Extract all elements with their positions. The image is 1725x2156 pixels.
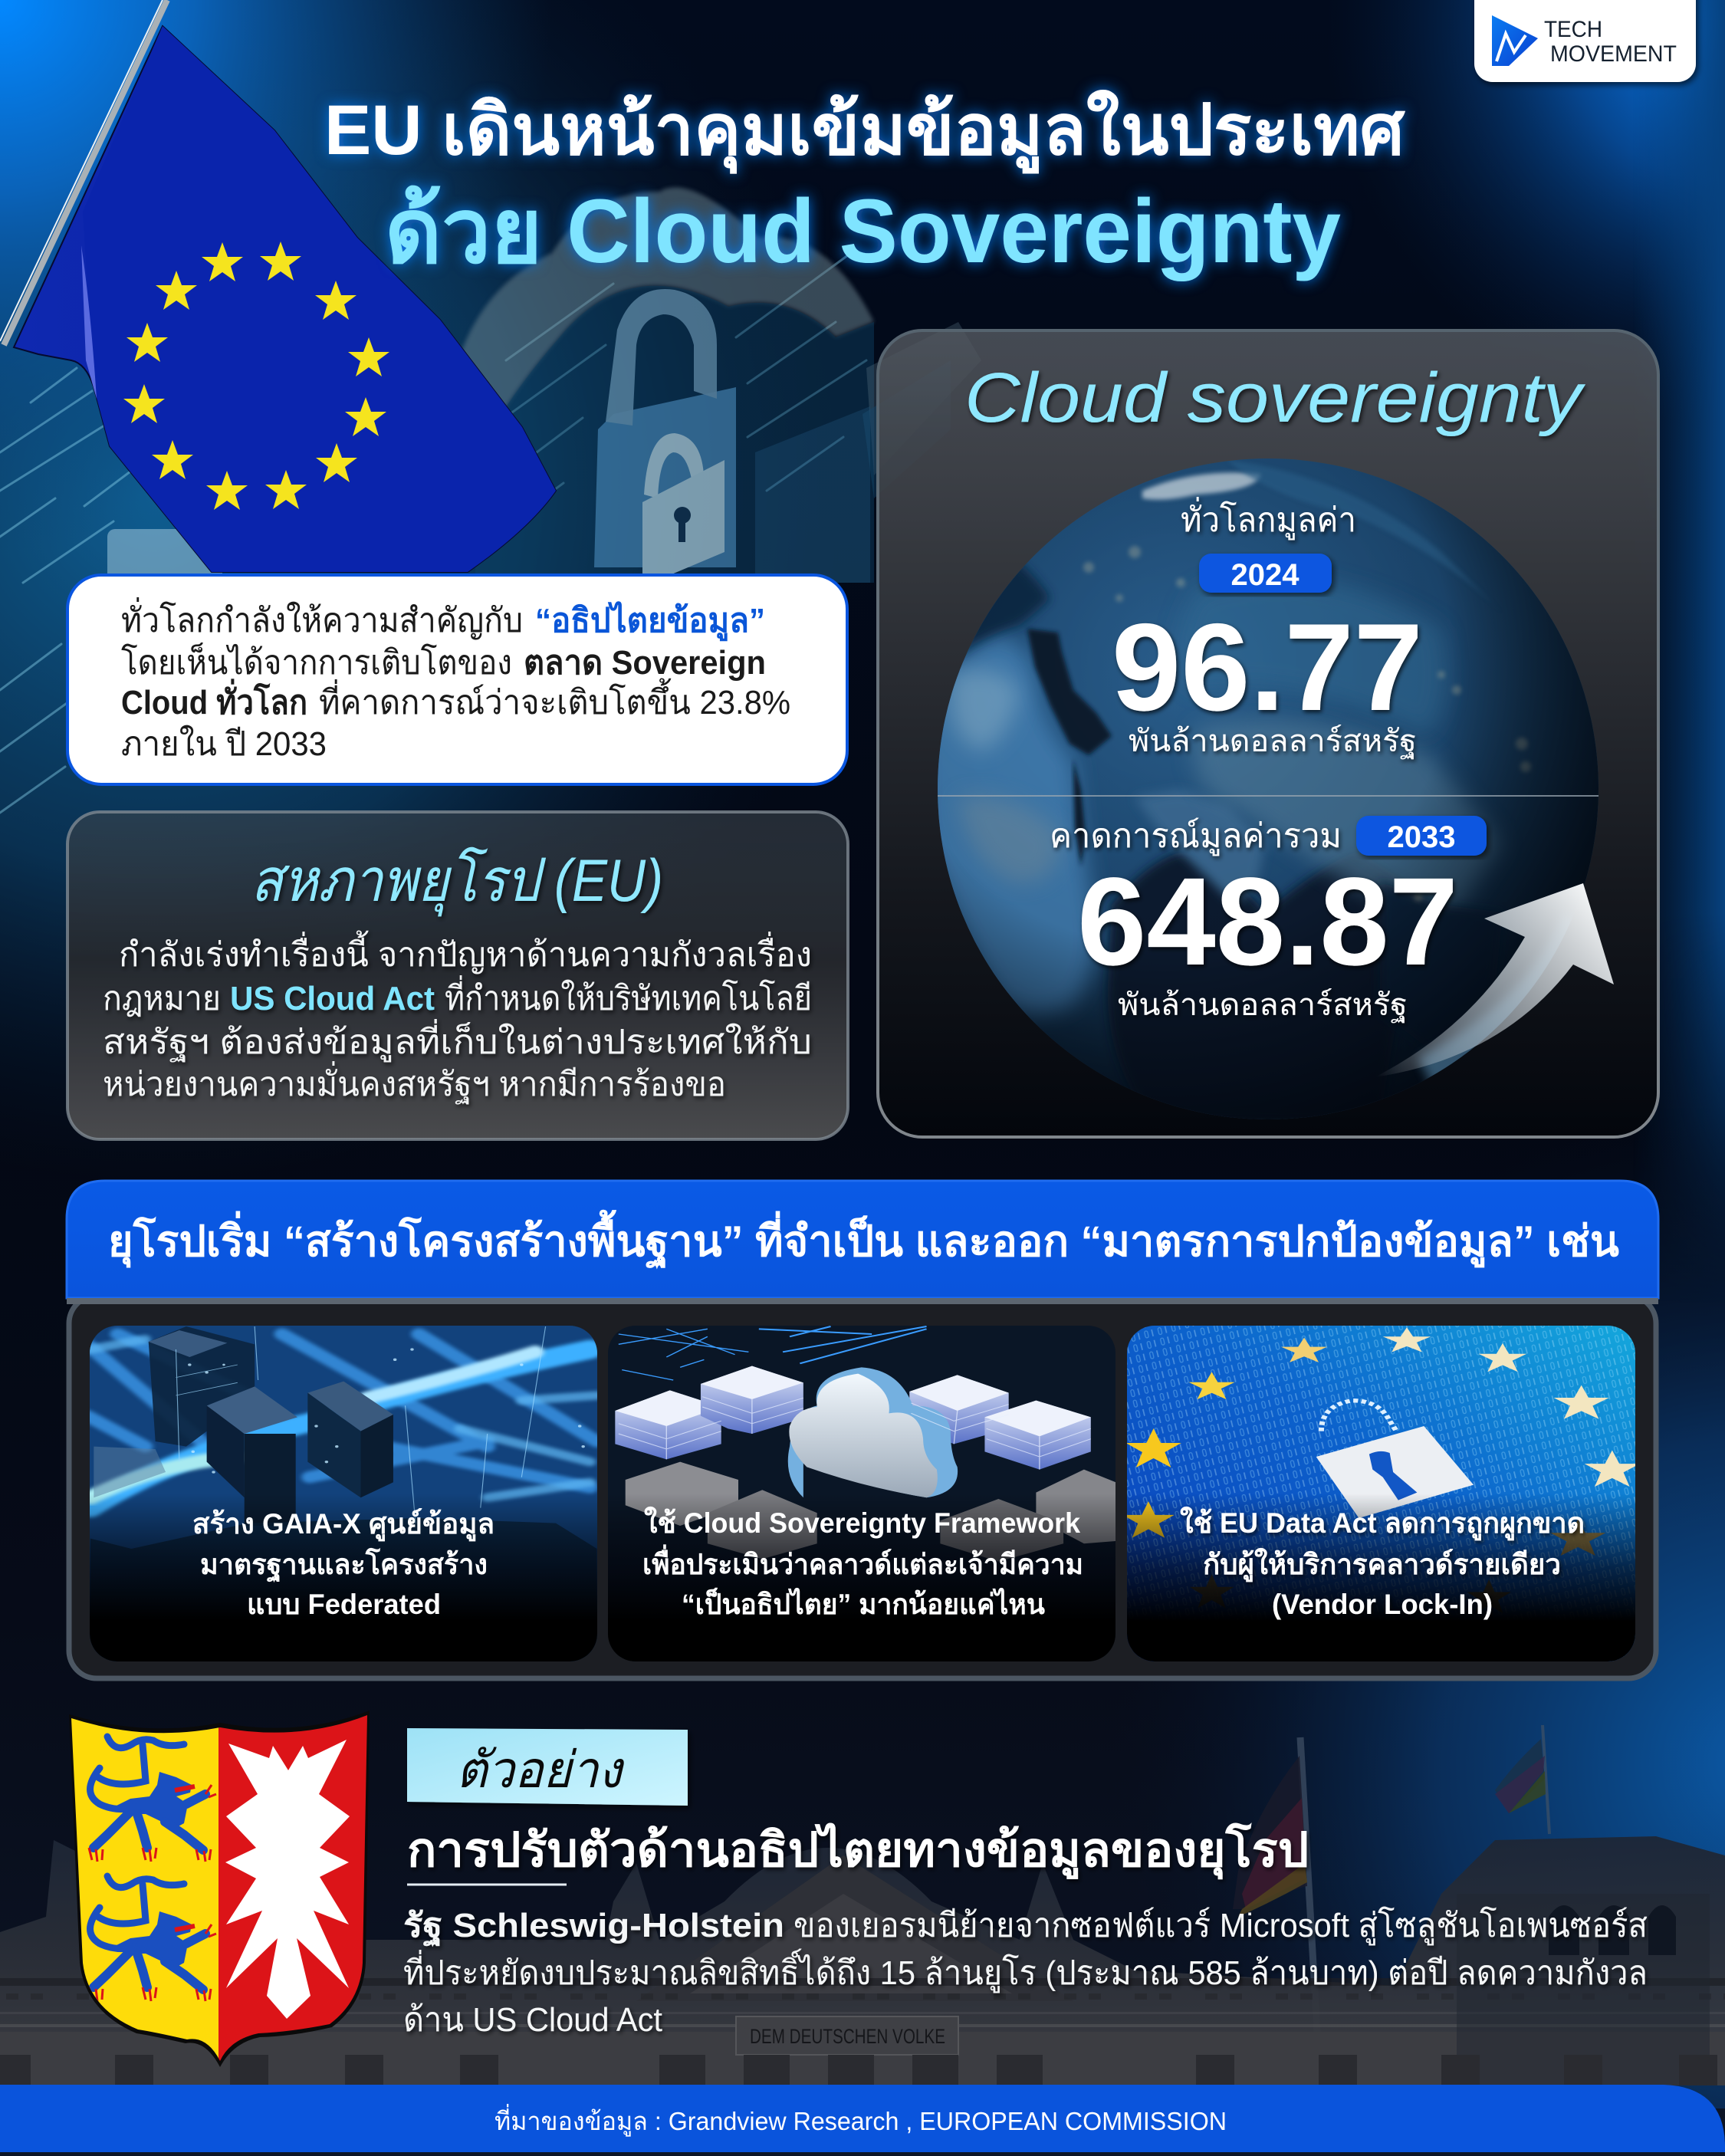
text: EU Data Act: ใช้ EU Data Act ลดการถูกผูกขาด [1180, 1506, 1585, 1541]
card: Cloud Sovereignty Framework [608, 1326, 1116, 1661]
globe [920, 458, 1598, 1119]
text: building inscription: DEM DEUTSCHEN VOLKE [750, 2025, 945, 2048]
title: ด้วย Cloud Sovereignty [385, 181, 1341, 282]
text: GAIA-X: มาตรฐานและโครงสร้าง [200, 1547, 488, 1582]
panel: intro text: Cloud ทั่วโลก [121, 679, 307, 721]
panel: intro text: “อธิปไตยข้อมูล” [535, 600, 765, 641]
text: forecast label: คาดการณ์มูลค่ารวม [1050, 817, 1342, 856]
card: EU Data Act [1122, 1326, 1640, 1661]
header band: ยุโรปเริ่ม “สร้างโครงสร้างพื้นฐาน” ที่จำเป็น และออก “มาตรการปกป้องข้อมูล” เช่น [108, 1210, 1619, 1269]
panel: intro text: โดยเห็นได้จากการเติบโตของ [121, 643, 512, 682]
icon: EU flag [0, 0, 556, 572]
panel: intro text: ภายใน ปี 2033 [121, 725, 327, 763]
badge: 2024 [1199, 554, 1332, 593]
text: EU Data Act: (Vendor Lock-In) [1272, 1589, 1493, 1620]
header band [67, 1181, 1658, 1304]
text: EU Data Act [1180, 1506, 1585, 1620]
stat: 648.87: 648.87 [1077, 851, 1458, 991]
text: example body: ที่ประหยัดงบประมาณลิขสิทธิ์ได้ถึง 15 ล้านยูโร (ประมาณ 585 ล้านบาท) ต่อปี ลดความกังวล [403, 1948, 1648, 1993]
text: framework: ใช้ Cloud Sovereignty Framework [644, 1506, 1080, 1539]
text: example body: ของเยอรมนีย้ายจากซอฟต์แวร์ Microsoft สู่โซลูชันโอเพนซอร์ส [794, 1906, 1648, 1946]
panel: Cloud sovereignty [878, 330, 1658, 1137]
stat: 96.77: 96.77 [1112, 598, 1423, 737]
text: EU body: กฎหมาย [103, 980, 221, 1017]
badge: 2033: 2033 [1388, 820, 1455, 854]
text: GAIA-X: แบบ Federated [247, 1589, 441, 1620]
arrow: growth [1375, 883, 1614, 1077]
heading: EU: สหภาพยุโรป (EU) [251, 846, 663, 917]
badge: 2024: 2024 [1231, 558, 1300, 592]
text: global value label: ทั่วโลกมูลค่า [1181, 496, 1356, 541]
shield: nettle leaf [225, 1740, 350, 2019]
text: framework: เพื่อประเมินว่าคลาวด์แต่ละเจ้ามีความ [642, 1544, 1083, 1580]
text: EU body: ที่กำหนดให้บริษัทเทคโนโลยี [445, 974, 812, 1017]
heading: Cloud sovereignty: Cloud sovereignty [964, 359, 1585, 437]
text: EU body: หน่วยงานความมั่นคงสหรัฐฯ หากมีการร้องขอ [103, 1060, 726, 1104]
text: framework: “เป็นอธิปไตย” มากน้อยแค่ไหน [682, 1586, 1045, 1620]
text: EU body: สหรัฐฯ ต้องส่งข้อมูลที่เก็บในต่างประเทศให้กับ [103, 1018, 812, 1063]
logo: Tech Movement: TECH [1544, 17, 1602, 42]
logo: Tech Movement [1474, 0, 1696, 82]
heading: example: การปรับตัวด้านอธิปไตยทางข้อมูลของยุโรป [407, 1822, 1309, 1879]
panel: intro text [67, 575, 847, 784]
text: example body: ด้าน US Cloud Act [403, 2001, 662, 2039]
panel: intro text: ตลาด Sovereign [524, 644, 766, 682]
text: unit: พันล้านดอลลาร์สหรัฐ [1129, 724, 1417, 760]
footer [0, 2085, 1725, 2152]
panel: intro text: ทั่วโลกกำลังให้ความสำคัญกับ [121, 597, 523, 639]
text: GAIA-X [192, 1508, 495, 1620]
background: cloud and padlock [107, 187, 981, 583]
text: framework [642, 1506, 1083, 1620]
text: example body [403, 1906, 1648, 2039]
icon: Schleswig-Holstein shield [69, 1710, 372, 2070]
footer: ที่มาของข้อมูล : Grandview Research , EUROPEAN COMMISSION [495, 2104, 1227, 2137]
text: EU body: กำลังเร่งทำเรื่องนี้ จากปัญหาด้านความกังวลเรื่อง [119, 930, 812, 974]
logo: Tech Movement: MOVEMENT [1550, 41, 1677, 67]
badge: 2033 [1356, 816, 1487, 856]
text: unit: พันล้านดอลลาร์สหรัฐ [1118, 988, 1408, 1024]
text: EU body: US Cloud Act [230, 980, 435, 1017]
title [324, 90, 1406, 282]
panel: intro text: ที่คาดการณ์ว่าจะเติบโตขึ้น 23.8% [319, 678, 790, 721]
card: GAIA-X [87, 1326, 597, 1661]
text: example body: รัฐ Schleswig-Holstein [403, 1907, 784, 1947]
title: EU เดินหน้าคุมเข้มข้อมูลในประเทศ [324, 90, 1406, 174]
panel: measures [67, 1181, 1658, 1678]
text: GAIA-X: สร้าง GAIA-X ศูนย์ข้อมูล [192, 1508, 495, 1542]
shield: lions [89, 1737, 216, 2001]
tag: example: ตัวอย่าง [456, 1741, 626, 1798]
background: Reichstag building [0, 1725, 1725, 2085]
text: EU body [103, 930, 812, 1104]
text: EU Data Act: กับผู้ให้บริการคลาวด์รายเดียว [1203, 1547, 1561, 1582]
panel: European Union [67, 812, 848, 1139]
tag: example [407, 1728, 688, 1806]
